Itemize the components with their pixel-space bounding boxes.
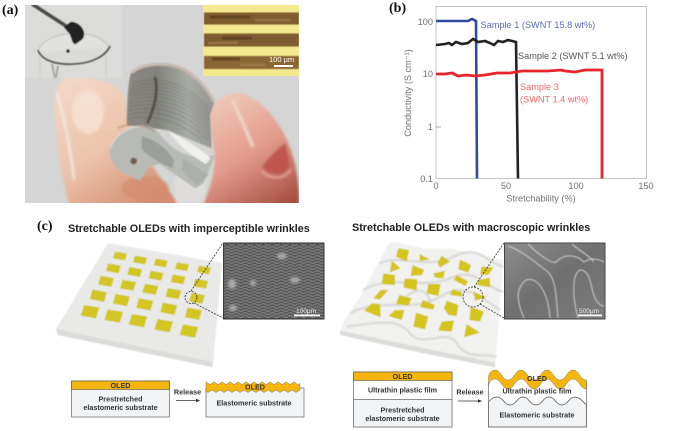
diagram: after release: Ultrathin plastic film	[502, 386, 572, 396]
label (a): (a)	[2, 3, 19, 18]
legend: sample 3: (SWNT 1.4 wt%)	[520, 94, 588, 104]
y axis labels: 10	[423, 69, 433, 79]
legend: sample 2: Sample 2 (SWNT 5.1 wt%)	[518, 51, 628, 61]
diagram: before release	[72, 381, 170, 417]
substrate with OLED array	[56, 243, 222, 367]
diagram: before release: elastomeric substrate	[365, 414, 440, 423]
legend: sample 1: Sample 1 (SWNT 15.8 wt%)	[480, 20, 595, 30]
diagram: after release: OLED	[527, 374, 547, 383]
inset: SEM macroscopic wrinkles	[504, 243, 605, 319]
y axis labels: 1	[428, 122, 433, 132]
diagram: before release: Prestretched	[99, 394, 142, 404]
wrinkled substrate with OLED patches	[340, 242, 503, 367]
diagram: after release: Elastomeric substrate	[499, 410, 575, 420]
scale bar: 500μm	[579, 308, 599, 315]
series: sample 1	[436, 19, 477, 178]
y axis labels: 100	[418, 17, 433, 27]
photo: stretched device top	[109, 64, 215, 188]
panel: macroscopic wrinkles	[340, 222, 605, 427]
diagram: before release: elastomeric substrate	[83, 403, 158, 412]
diagram: before release: OLED	[111, 381, 130, 390]
label (c): (c)	[37, 219, 53, 234]
magnifier circle and leader lines	[185, 243, 223, 318]
x axis labels	[433, 181, 654, 191]
photo: stretched device bottom ring	[109, 125, 215, 188]
chart: conductivity versus stretchability	[403, 6, 654, 204]
diagram: after release: Elastomeric substrate	[216, 398, 292, 408]
series: sample 2	[436, 39, 518, 178]
diagram: before release: Ultrathin plastic film	[368, 386, 437, 394]
arrow: release	[174, 388, 201, 402]
label (b): (b)	[389, 1, 406, 16]
photo: right finger	[203, 93, 299, 206]
diagram: after release: OLED	[245, 382, 265, 392]
panel: photo of stretchable conductor	[25, 4, 299, 206]
series: sample 3	[436, 70, 602, 178]
inset: beaker with carbon nanotube gel	[30, 5, 111, 78]
diagram: after release	[206, 382, 304, 417]
photo: gap between fingers	[176, 177, 204, 202]
x axis labels: 150	[638, 181, 654, 191]
x axis labels: 0	[433, 181, 439, 191]
arrow: release	[456, 388, 484, 403]
diagram: after release	[488, 370, 586, 427]
magnifier circle and leader lines	[463, 243, 504, 318]
diagram: before release: Prestretched	[381, 406, 424, 414]
x axis labels: 100	[568, 181, 584, 191]
inset: SEM fine wrinkles	[224, 243, 324, 319]
diagram: before release	[354, 372, 452, 427]
arrow: release: Release	[456, 388, 484, 396]
x axis title: Stretchability (%)	[506, 194, 576, 204]
x axis labels: 50	[501, 181, 511, 191]
scale bar: 100 μm	[269, 55, 294, 64]
legend: sample 3: Sample 3	[520, 82, 559, 92]
heading: Stretchable OLEDs with macroscopic wrinkles	[352, 222, 590, 234]
heading: Stretchable OLEDs with imperceptible wrinkles	[68, 223, 310, 235]
y axis labels: 0.1	[420, 174, 433, 184]
photo: left finger	[55, 78, 178, 206]
scale bar: 100μm	[296, 308, 316, 315]
inset: micrograph of conductor lines	[203, 5, 299, 76]
chart frame	[436, 6, 646, 178]
y axis labels	[418, 17, 433, 184]
panel: imperceptible wrinkles	[56, 223, 324, 417]
diagram: before release: OLED	[393, 372, 412, 381]
y axis title: Conductivity (S cm⁻¹)	[403, 49, 413, 137]
arrow: release: Release	[174, 388, 201, 396]
